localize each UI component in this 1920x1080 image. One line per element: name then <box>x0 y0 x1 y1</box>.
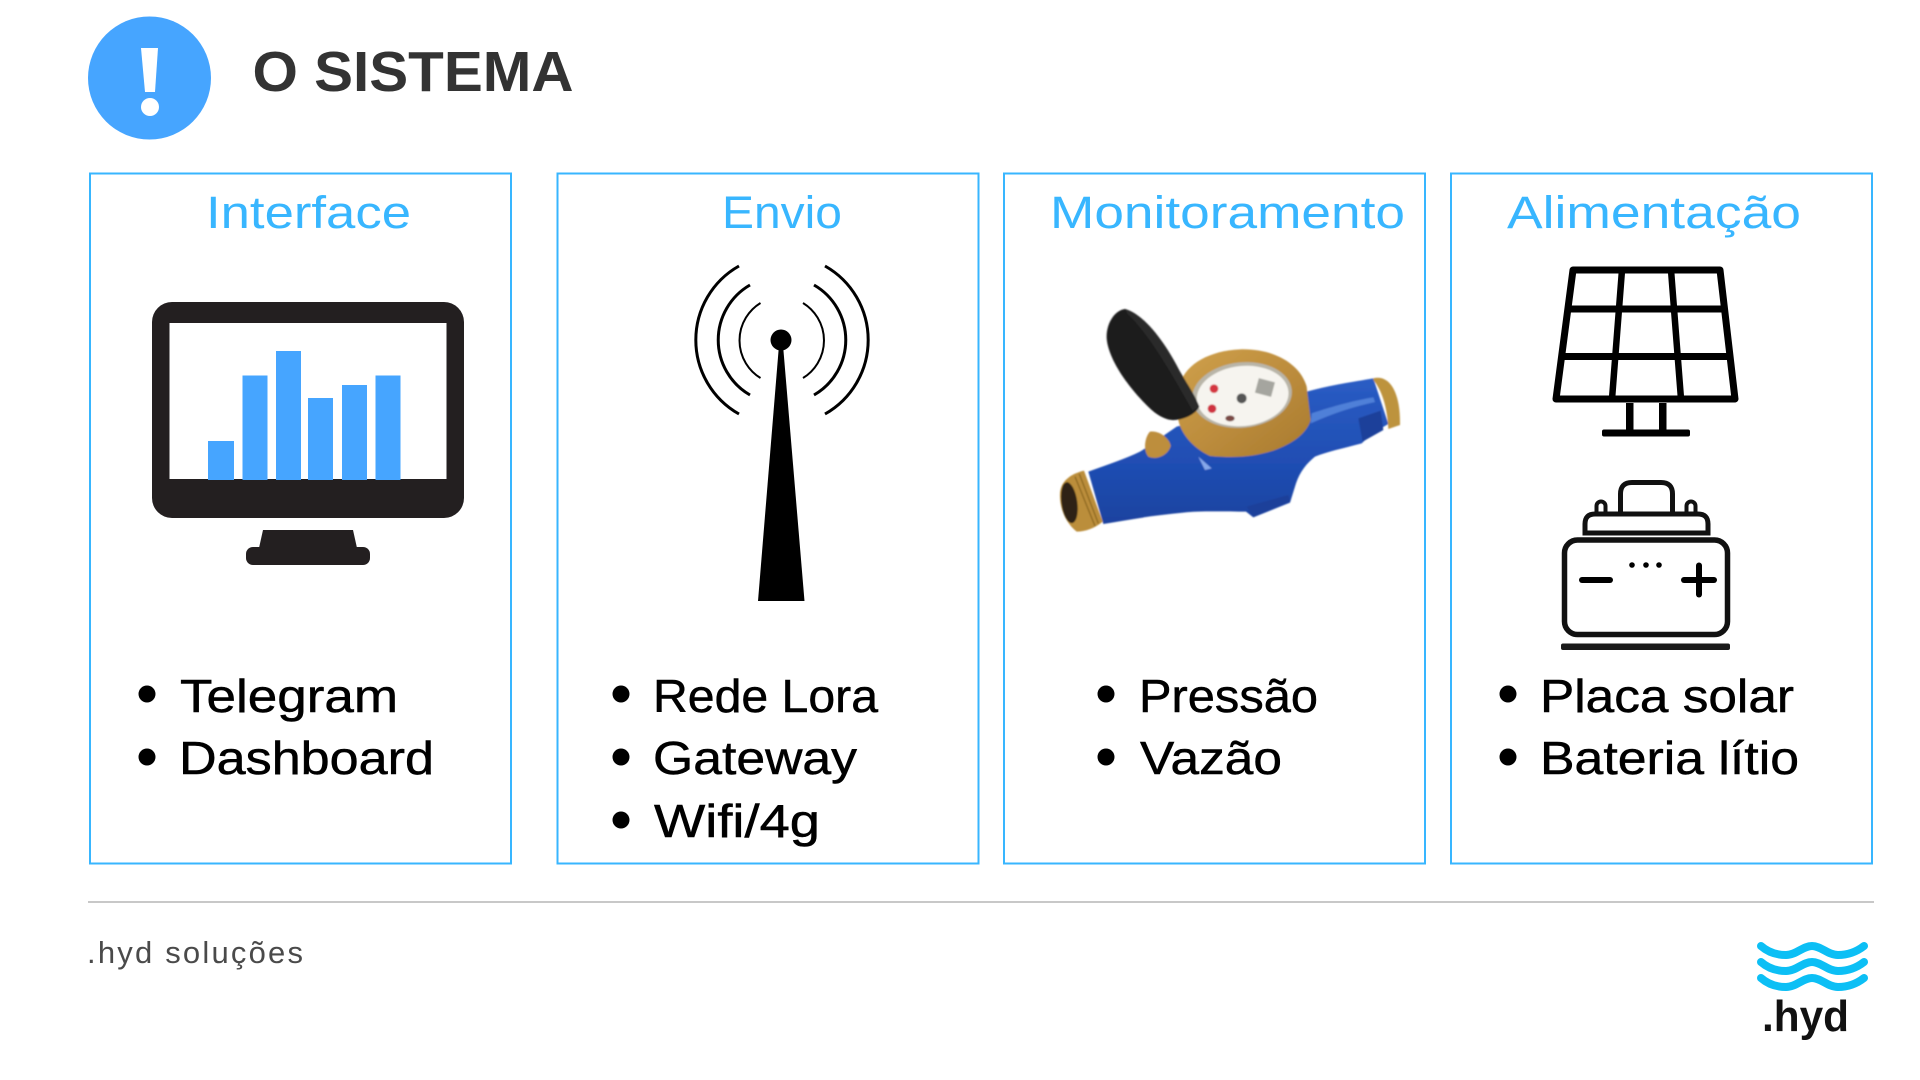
icon: radio antenna <box>696 266 868 601</box>
icon: solar panel <box>1556 270 1735 436</box>
heading: Alimentação: Alimentação <box>1507 187 1801 238</box>
bullet list: Interface: Dashboard <box>179 732 434 784</box>
heading: Envio: Envio <box>722 187 842 238</box>
logo: .hyd: .hyd <box>1762 992 1849 1041</box>
heading: Interface: Interface <box>206 187 411 238</box>
panel: Monitoramento <box>1004 174 1425 864</box>
bullet list: Alimentação: Bateria lítio <box>1540 732 1799 784</box>
bullet list: Interface: Telegram <box>180 670 398 722</box>
bullet list: Envio: Wifi/4g <box>654 795 820 847</box>
image: water meter <box>1059 309 1400 532</box>
bullet list: Envio: Rede Lora <box>653 670 878 722</box>
heading: Monitoramento: Monitoramento <box>1050 187 1405 238</box>
icon: battery <box>1561 482 1730 650</box>
bullet list: Interface <box>138 670 434 784</box>
bullet list: Alimentação: Placa solar <box>1540 670 1794 722</box>
bullet list: Monitoramento <box>1098 670 1318 784</box>
panel: Alimentação <box>1451 174 1872 864</box>
title: O SISTEMA <box>252 40 574 104</box>
footer text: .hyd soluções <box>87 935 303 970</box>
bullet list: Monitoramento: Vazão <box>1140 732 1282 784</box>
bullet list: Envio <box>612 670 878 847</box>
panel: Interface <box>90 174 511 864</box>
bullet list: Monitoramento: Pressão <box>1139 670 1318 722</box>
header: exclamation icon <box>88 16 211 140</box>
icon: monitor with bar chart <box>152 302 464 565</box>
bullet list: Alimentação <box>1500 670 1799 784</box>
bullet list: Envio: Gateway <box>653 732 857 784</box>
panel: Envio <box>558 174 978 864</box>
logo: .hyd <box>1761 946 1864 1041</box>
